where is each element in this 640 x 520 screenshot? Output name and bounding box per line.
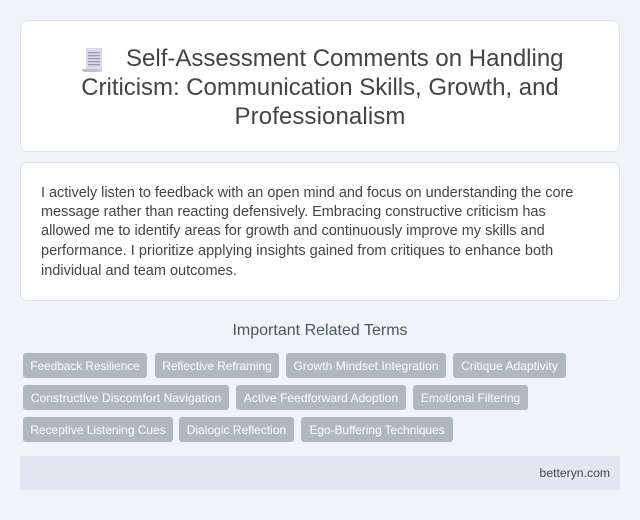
tag list: Critique Adaptivity xyxy=(461,359,558,373)
footer source: betteryn.com xyxy=(540,466,610,480)
heading: related terms: Important Related Terms xyxy=(232,322,408,339)
tag list: Feedback Resilience xyxy=(30,359,140,373)
tag list: Active Feedforward Adoption xyxy=(244,391,398,405)
title xyxy=(81,45,564,130)
tag list: Receptive Listening Cues xyxy=(30,423,166,437)
description text: message rather than reacting defensively. Embracing constructive criticism has xyxy=(41,204,546,220)
description text: performance. I prioritize applying insights gained from critiques to enhance both xyxy=(41,243,553,259)
description card xyxy=(20,162,620,301)
tag list: Reflective Reframing xyxy=(162,359,272,373)
tag list xyxy=(23,353,566,442)
title card xyxy=(20,20,620,152)
title: Self-Assessment Comments on Handling xyxy=(126,45,564,72)
tag list: Emotional Filtering xyxy=(421,391,520,405)
title: Professionalism xyxy=(235,103,405,130)
description text: I actively listen to feedback with an open mind and focus on understanding the core xyxy=(41,185,573,201)
title: Criticism: Communication Skills, Growth, and xyxy=(81,74,559,101)
icon: document scroll xyxy=(82,48,102,72)
description text: individual and team outcomes. xyxy=(41,263,237,279)
tag list: Dialogic Reflection xyxy=(187,423,286,437)
tag list: Constructive Discomfort Navigation xyxy=(31,391,221,405)
tag list: Ego-Buffering Techniques xyxy=(309,423,445,437)
tag list: Growth Mindset Integration xyxy=(293,359,439,373)
description text: allowed me to identify areas for growth and continuously improve my skills and xyxy=(41,223,545,239)
description text xyxy=(41,185,573,279)
footer bar xyxy=(20,456,620,490)
